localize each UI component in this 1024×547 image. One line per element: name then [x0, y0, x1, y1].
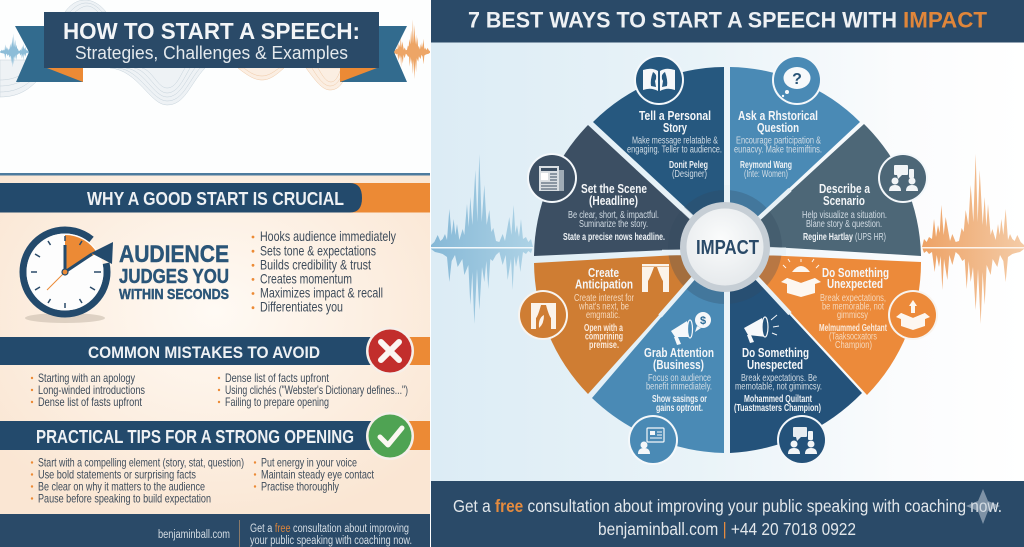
sector: tell a personal story: Donit Peleg: [669, 160, 708, 171]
right footer call to action: [431, 481, 1024, 547]
heading: WHY A GOOD START IS CRUCIAL: [87, 189, 344, 209]
bullet list: mistakes: Failing to prepare opening: [225, 395, 329, 409]
callout: audience judges you: [119, 241, 229, 303]
sector: describe a scenario: Scenario: [823, 193, 865, 208]
icon: megaphone with dollar: [671, 312, 711, 345]
sector: ask a rhetorical question: Ask a Rhstorical: [738, 108, 818, 123]
sector: describe a scenario: Help visualize a situation.: [802, 210, 887, 221]
sector: set the scene: [527, 125, 712, 256]
icon: open book with faces: [634, 55, 684, 105]
icon: right orange waveform: [922, 154, 1024, 324]
bullet list: tips: [31, 456, 374, 506]
bullet list: mistakes: [31, 371, 408, 409]
sector: create anticipation: emgmatic.: [586, 310, 620, 321]
bullet list: tips: Start with a compelling element (story, stat, question): [38, 456, 244, 470]
bullet list: tips: Maintain steady eye contact: [261, 468, 374, 482]
sector: set the scene: (Headline): [589, 193, 638, 208]
sector: tell a personal story: [593, 55, 724, 236]
sector: set the scene: Suminarize the story.: [579, 219, 648, 230]
bullet list: tips: Be clear on why it matters to the audience: [38, 480, 205, 494]
hub: impact: [660, 185, 790, 316]
icon: box in circle: [888, 290, 938, 340]
left footer: Get a free consultation about improving: [250, 523, 409, 535]
sector: do something unexpected (orange): Break expectations,: [820, 293, 886, 304]
sector: do something unespected (navy): (Tuastmasters Champion): [734, 403, 821, 414]
sector: create anticipation: premise.: [589, 340, 619, 351]
sector: describe a scenario: Describe a: [819, 181, 871, 196]
heading: COMMON MISTAKES TO AVOID: [88, 343, 320, 362]
icon: person with speech card: [628, 415, 678, 465]
sector: do something unexpected (orange): gimmicsy: [837, 310, 868, 321]
sector: create anticipation: what's next, be: [578, 302, 629, 312]
contour wave decoration: [0, 0, 205, 105]
sector: tell a personal story: Make message relatable &: [632, 136, 718, 147]
sector: ask a rhetorical question: Reymond Wang: [740, 160, 792, 171]
sector: grab attention: Show sasings or: [652, 394, 707, 405]
sector: tell a personal story: engaging. Teller to audience.: [627, 144, 722, 156]
right header with title: 7 BEST WAYS TO START A SPEECH WITH: [468, 8, 897, 32]
bullet list: mistakes: Dense list of fasts upfront: [38, 395, 143, 409]
bullet list: reasons: Builds credibility & trust: [260, 256, 371, 272]
bullet list: mistakes: Dense list of facts upfront: [225, 371, 330, 385]
sector: describe a scenario: Regine Hartlay: [803, 232, 853, 243]
sector: do something unexpected (orange): Unexpected: [827, 276, 883, 291]
sector: describe a scenario: [740, 124, 928, 256]
right header with title: [431, 0, 1024, 42]
bullet list: tips: Pause before speaking to build expectation: [38, 492, 211, 506]
subtitle text: Strategies, Challenges & Examples: [75, 43, 348, 63]
icon: people with speech bubbles: [777, 415, 827, 465]
icon: megaphone: [744, 315, 779, 343]
orange contour wave decoration: [238, 68, 345, 90]
bullet list: reasons: Maximizes impact & recall: [260, 284, 383, 300]
sector: grab attention: (Business): [653, 357, 704, 372]
callout: audience judges you: WITHIN SECONDS: [119, 287, 229, 303]
footer line two: benjaminball.com | +44 20 7018 0922: [598, 519, 856, 539]
icon: question thought bubble: [772, 55, 822, 105]
icon: two people talking: [878, 153, 928, 203]
sector: do something unexpected (orange): Do Something: [822, 265, 889, 280]
left footer: benjaminball.com: [158, 529, 230, 541]
bullet list: reasons: Creates momentum: [260, 270, 352, 286]
sector: tell a personal story: (Designer): [672, 169, 707, 180]
icon: small orange waveform: [394, 19, 430, 79]
icon: small blue waveform: [0, 33, 29, 67]
sector: do something unexpected (orange): be memorable, not: [822, 302, 884, 312]
icon: clock: [15, 222, 115, 323]
sector: grab attention: [592, 258, 724, 465]
bullet list: mistakes: Using clichés ("Webster's Dictionary defines..."): [225, 383, 408, 397]
panel: right background: [431, 42, 1024, 482]
panel: practical tips: [0, 412, 430, 506]
icon: green check: [366, 412, 414, 460]
sector: create anticipation: Anticipation: [575, 276, 633, 292]
sector: do something unespected (navy): Do Something: [742, 345, 809, 360]
sector: create anticipation: comprining: [585, 332, 623, 342]
sector: grab attention: Grab Attention: [644, 345, 714, 360]
sector: ask a rhetorical question: (Inte: Women): [744, 169, 788, 180]
sector: create anticipation: Create interest for: [574, 293, 634, 304]
sector: set the scene: Set the Scene: [581, 181, 647, 196]
callout: audience judges you: AUDIENCE: [119, 241, 229, 268]
sector: do something unespected (navy): Mohammed Quiltant: [744, 394, 812, 405]
sector: describe a scenario: Blane story & question.: [806, 219, 882, 230]
icon: red cross: [366, 327, 414, 375]
panel: common mistakes to avoid: [0, 327, 430, 409]
sector: do something unespected (navy): Unespected: [747, 357, 803, 372]
icon: curtains in circle: [518, 290, 568, 340]
heading: PRACTICAL TIPS FOR A STRONG OPENING: [36, 427, 354, 447]
bullet list: mistakes: Long-winded introductions: [38, 383, 145, 397]
sector: ask a rhetorical question: Encourage participation &: [736, 136, 821, 147]
sector: describe a scenario: (UPS HR): [855, 232, 886, 243]
bullet list: reasons: Hooks audience immediately: [260, 228, 396, 244]
right header with title: IMPACT: [903, 8, 987, 32]
sector: grab attention: benefit immediately.: [646, 382, 712, 392]
sector: set the scene: Be clear, short, & impactful.: [568, 210, 659, 221]
sector: do something unexpected (orange): (Taaksocxators: [829, 332, 877, 342]
callout: audience judges you: JUDGES YOU: [119, 266, 229, 288]
bullet list: reasons: Sets tone & expectations: [260, 242, 376, 258]
sector: do something unexpected (orange): Melmummed Gehtant: [819, 323, 887, 334]
bullet list: mistakes: Starting with an apology: [38, 371, 135, 385]
sector: grab attention: Focus on audience: [648, 373, 711, 384]
left footer: your public speaking with coaching now.: [250, 535, 412, 547]
bullet list: reasons: [252, 228, 396, 315]
wheel of seven ways: [518, 55, 938, 465]
sector: do something unespected (navy): memotable, not gimimcsy.: [735, 382, 822, 392]
panel: left header area: [0, 0, 430, 173]
hub: impact: IMPACT: [696, 237, 759, 259]
icon: curtains: [642, 264, 669, 292]
sector: ask a rhetorical question: Question: [757, 120, 799, 135]
sector: do something unexpected (orange): Champion): [835, 340, 872, 351]
icon: newspaper: [527, 153, 577, 203]
sector: do something unexpected (orange): [740, 254, 938, 395]
title text: HOW TO START A SPEECH:: [63, 18, 360, 44]
bullet list: tips: Use bold statements or surprising facts: [38, 468, 196, 482]
icon: sparkle: [966, 489, 1000, 524]
bullet list: tips: Practise thoroughly: [261, 480, 339, 494]
title ribbon: [15, 12, 407, 82]
sector: create anticipation: [518, 253, 712, 394]
sector: tell a personal story: Story: [663, 120, 688, 135]
sector: do something unespected (navy): Break expectations. Be: [741, 373, 817, 384]
sector: set the scene: State a precise nows headline.: [563, 232, 665, 243]
sector: grab attention: gains optront.: [656, 403, 703, 414]
icon: megaphone with dollar: $: [700, 315, 706, 327]
bullet list: reasons: Differentiates you: [260, 299, 343, 315]
icon: left blue waveform: [431, 154, 533, 324]
sector: tell a personal story: Tell a Personal: [639, 108, 711, 123]
left footer: [0, 514, 430, 547]
sector: create anticipation: Open with a: [584, 323, 623, 334]
icon: opening gift box: [781, 259, 821, 297]
sector: do something unespected (navy): [730, 259, 862, 465]
icon: question thought bubble: ?: [792, 71, 802, 88]
panel: left content background: [0, 173, 430, 516]
sector: ask a rhetorical question: [730, 55, 860, 236]
sector: create anticipation: Create: [588, 265, 619, 280]
bullet list: tips: Put energy in your voice: [261, 456, 357, 470]
panel: why a good start is crucial: [0, 183, 430, 323]
sector: ask a rhetorical question: eunacvy. Make tneimiftins.: [734, 144, 822, 156]
